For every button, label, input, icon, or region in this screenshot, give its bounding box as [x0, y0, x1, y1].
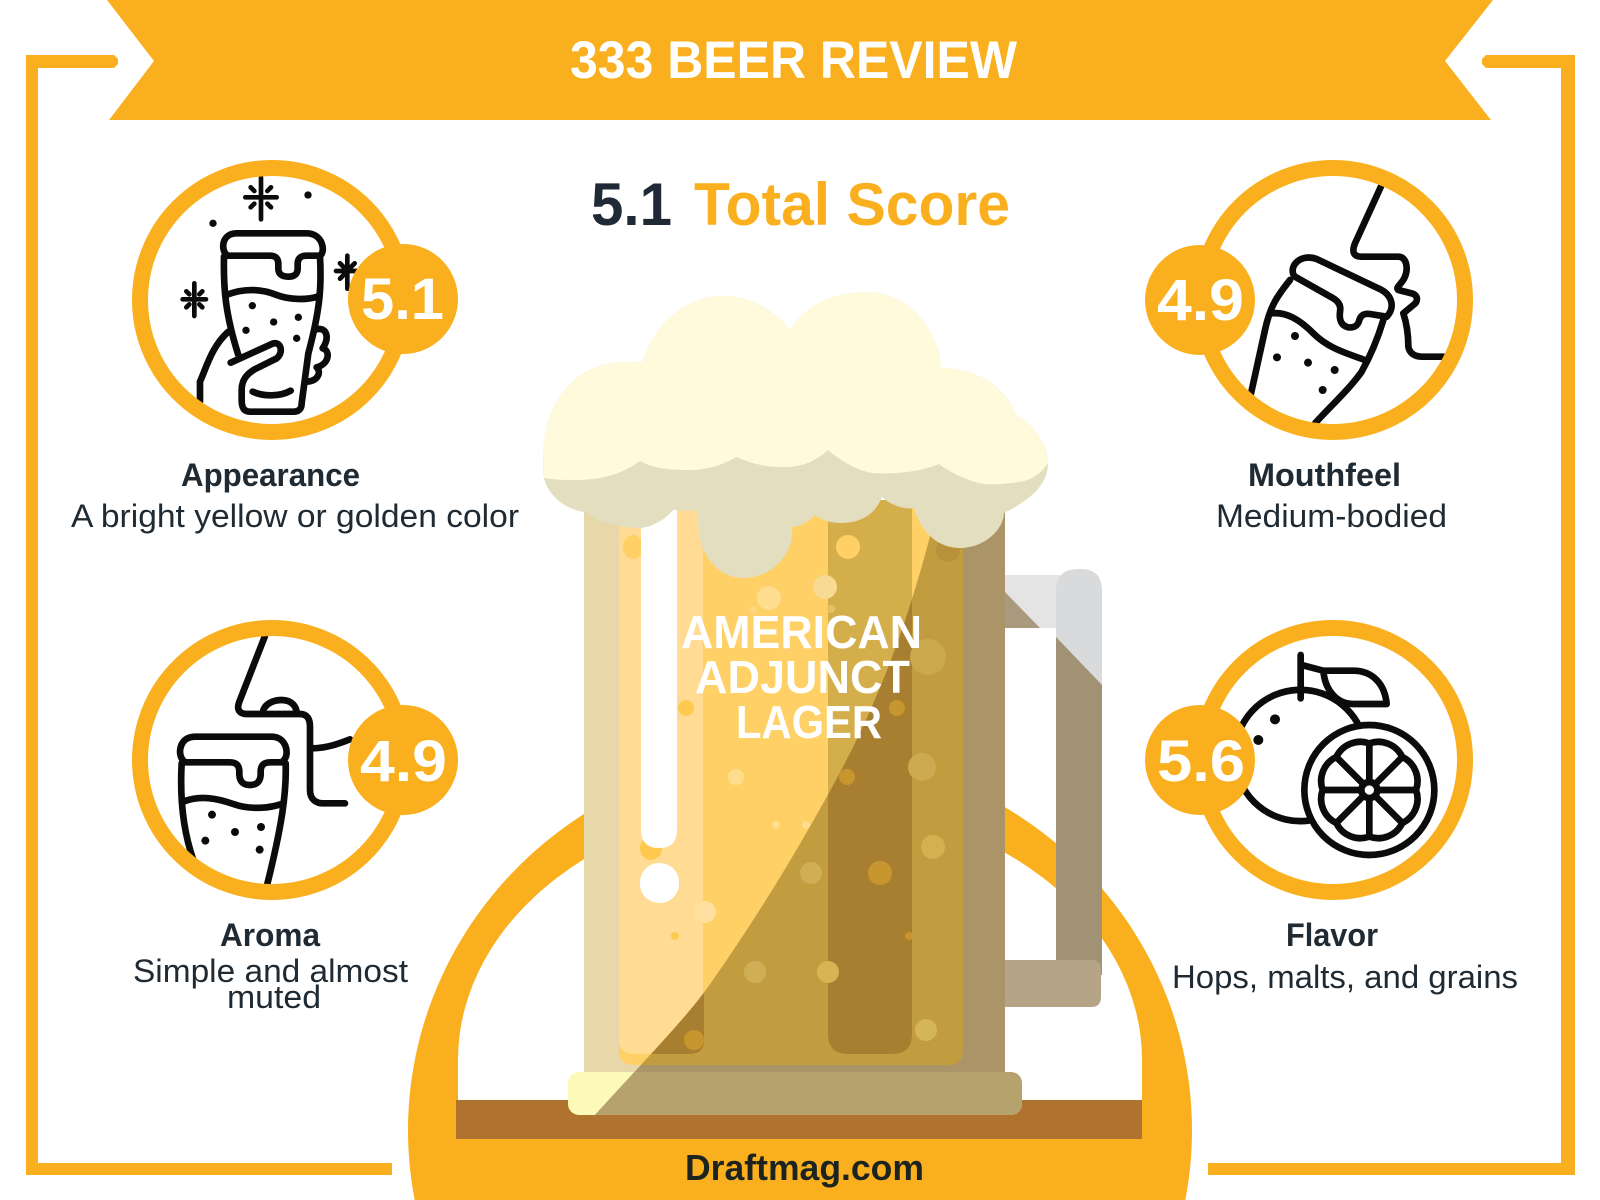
table: [456, 1100, 1142, 1139]
title: 333 BEER REVIEW: [570, 31, 1017, 90]
style label: AMERICAN: [681, 606, 922, 658]
icon: citrus fruit: [1235, 655, 1434, 855]
score badge: 4.9: [1157, 268, 1244, 333]
total score heading: Total Score: [694, 171, 1010, 238]
caption: [133, 917, 408, 1015]
panel: mouthfeel: [1145, 168, 1465, 534]
caption: [71, 457, 519, 534]
glass highlights: [640, 500, 679, 903]
caption: muted: [227, 979, 321, 1015]
beer mug: [543, 292, 1048, 1115]
arch behind mug: [408, 751, 1192, 1200]
caption: Appearance: [181, 457, 360, 493]
style label: LAGER: [736, 696, 882, 748]
caption: A bright yellow or golden color: [71, 498, 519, 534]
bubbles: [623, 535, 960, 1050]
caption: Simple and almost: [133, 953, 408, 989]
score badge: [348, 705, 458, 815]
caption: Flavor: [1286, 917, 1378, 953]
site credit: Draftmag.com: [685, 1147, 924, 1188]
caption: Mouthfeel: [1248, 457, 1401, 493]
score badge: [348, 244, 458, 354]
mug handle: [1005, 569, 1102, 1007]
panel: aroma: [133, 628, 458, 1015]
panel: appearance: [71, 168, 519, 534]
style label: ADJUNCT: [695, 651, 910, 703]
score badge: 5.1: [361, 267, 444, 332]
icon: nose over beer: [180, 636, 350, 887]
foam: [543, 292, 1048, 578]
caption: Aroma: [220, 917, 320, 953]
shaded side of mug: [568, 500, 1022, 1115]
icon: hand holding beer: [183, 177, 358, 412]
score badge: 4.9: [360, 729, 447, 794]
score badge: [1145, 705, 1255, 815]
caption: [1216, 457, 1447, 534]
score badge: [1145, 245, 1255, 355]
panel: flavor: [1145, 628, 1518, 995]
score badge: 5.6: [1157, 729, 1245, 794]
caption: Medium-bodied: [1216, 498, 1447, 534]
caption: [1172, 917, 1518, 995]
title banner: [107, 0, 1493, 120]
caption: Hops, malts, and grains: [1172, 959, 1518, 995]
icon: beer at lips: [1251, 185, 1443, 423]
total score heading: 5.1: [591, 171, 672, 238]
lit glass and beer: [568, 500, 1022, 1115]
style label: [681, 606, 922, 748]
